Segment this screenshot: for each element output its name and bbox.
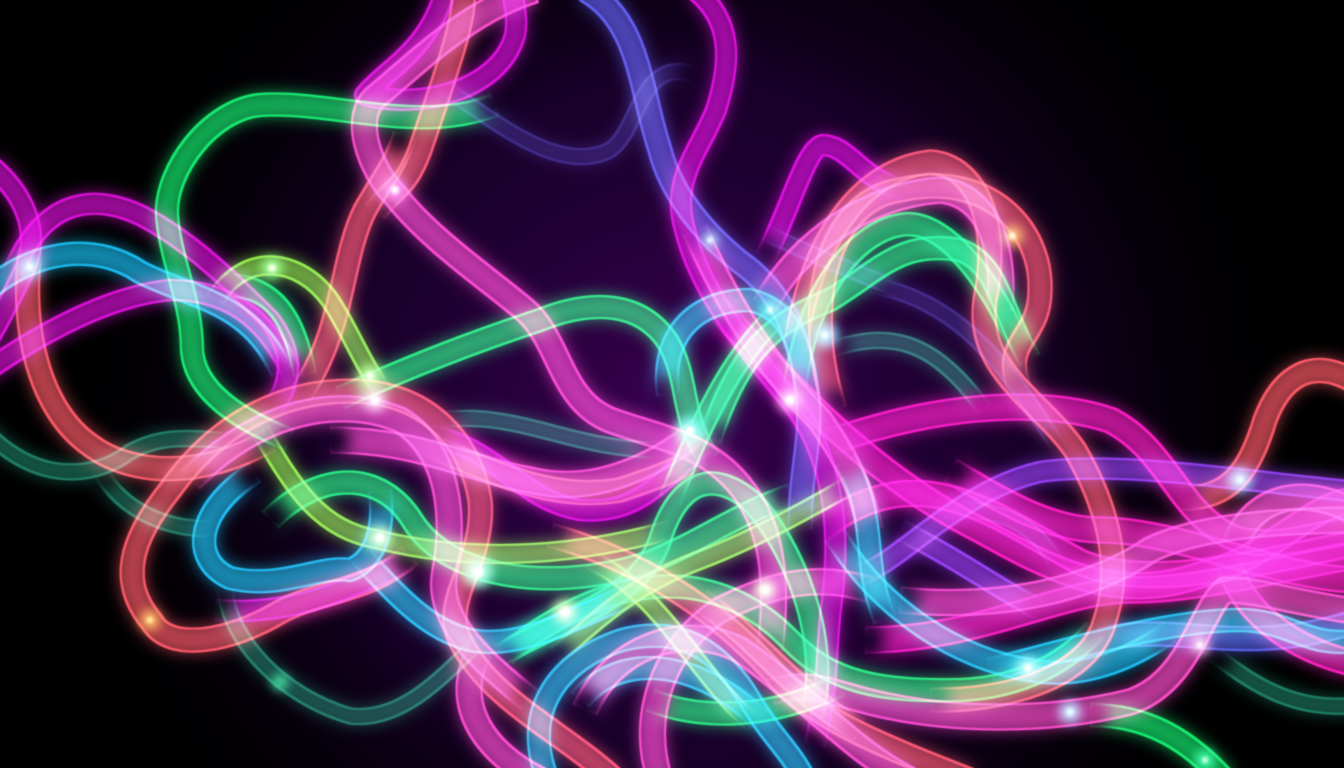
ribbons: left cluster xyxy=(0,105,495,469)
ribbons: bottom-left big loop xyxy=(132,391,792,768)
ribbons: top magenta loops xyxy=(364,0,835,745)
light points: glowing beads on the ribbons xyxy=(19,179,1252,768)
ribbons: bottom centre tangle xyxy=(469,483,1170,768)
ribbons: centre waves xyxy=(330,224,1030,510)
ribbons: right waves xyxy=(770,370,1344,768)
ribbons: right loops xyxy=(695,145,1344,700)
